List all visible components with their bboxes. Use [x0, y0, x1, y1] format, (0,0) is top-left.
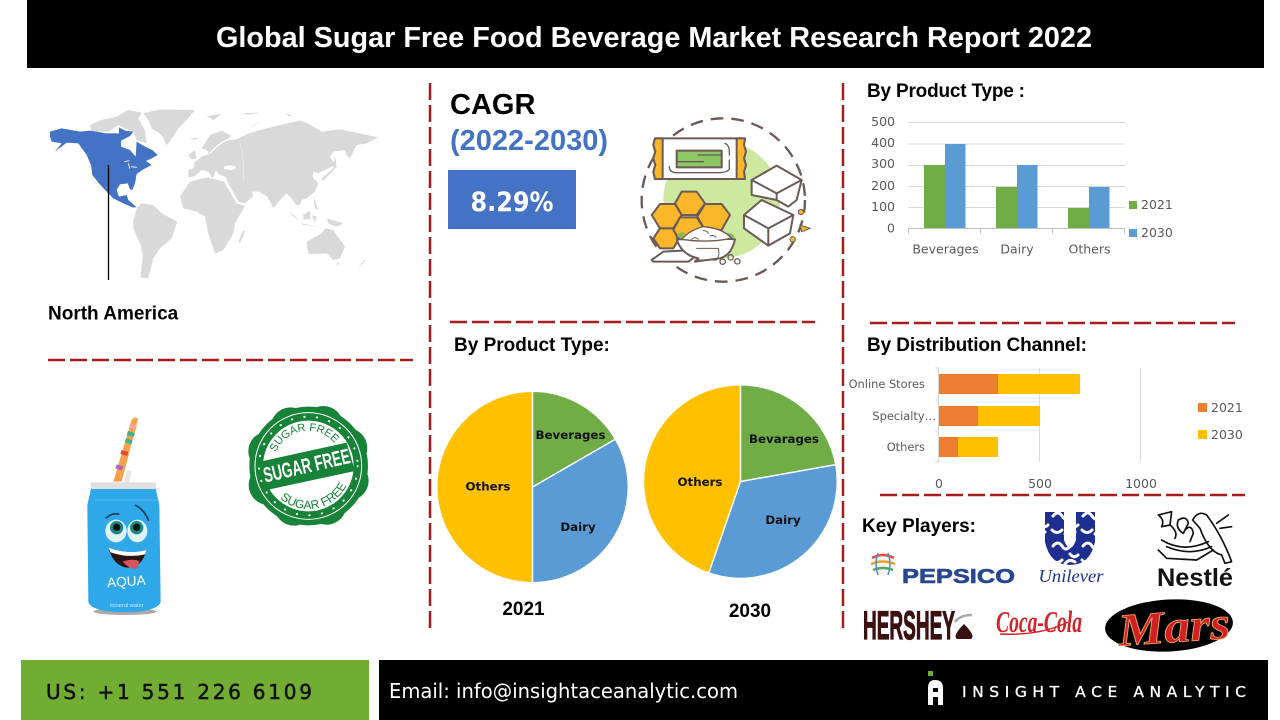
logo: Mars: Mars: [1115, 597, 1232, 656]
icon: sugar free seal: SUGAR FREE: [281, 482, 346, 509]
pie year labels: [502, 599, 771, 622]
legend: distribution channel: [1198, 400, 1243, 442]
email: Email: info@insightaceanalytic.com: [389, 679, 738, 703]
icon: blue aqua can: [87, 418, 161, 615]
region label: North America: [48, 304, 179, 324]
logo: Hershey: [863, 604, 972, 648]
heading: by distribution channel: By Distribution Channel:: [867, 335, 1087, 356]
bar chart: distribution channel: Others: [887, 440, 925, 454]
brand name: INSIGHT ACE ANALYTIC: [962, 683, 1246, 701]
pie chart 2030: [644, 385, 836, 578]
heading: by product type bars: By Product Type :: [867, 81, 1025, 102]
legend: product type: [1129, 197, 1173, 240]
logo: Hershey: HERSHEY: [863, 604, 955, 648]
heading: by product type pies: By Product Type:: [454, 335, 610, 356]
column chart: product type: Beverages: [912, 242, 979, 256]
icon: sugar free seal: SUGAR FREE: [270, 423, 340, 451]
bar chart: distribution channel: Specialty…: [872, 409, 936, 423]
logo: Unilever: Unilever: [1038, 566, 1105, 586]
connector line: [108, 165, 110, 280]
bar chart: distribution channel: 1000: [1125, 476, 1157, 491]
logo: Nestle: [1157, 512, 1233, 592]
icon: sugar free foods: [642, 118, 810, 282]
icon: sugar free seal: SUGAR FREE: [261, 444, 352, 487]
legend: product type: 2030: [1141, 225, 1173, 240]
pie chart 2021: Beverages: [536, 428, 605, 442]
logo: Coca-Cola: [996, 604, 1082, 639]
bar chart: distribution channel: 500: [1028, 476, 1052, 491]
world map: North America highlighted: [50, 109, 378, 280]
pie chart 2030: Dairy: [765, 513, 801, 527]
column chart: product type: 500: [871, 114, 895, 129]
column chart: product type: 200: [871, 178, 895, 193]
legend: distribution channel: 2021: [1211, 400, 1243, 415]
column chart: product type: 0: [887, 220, 895, 236]
pie year labels: 2030: [729, 601, 771, 622]
CAGR heading: [450, 89, 608, 157]
CAGR heading: (2022-2030): [450, 125, 608, 157]
icon: brand mark: [928, 671, 943, 705]
column chart: product type: 400: [871, 135, 895, 150]
title banner: [27, 0, 1264, 68]
logo: Unilever: [1038, 512, 1105, 586]
pie year labels: 2021: [502, 599, 545, 620]
pie chart 2021: Others: [466, 480, 510, 494]
column chart: product type: 300: [871, 156, 895, 171]
CAGR value box: 8.29%: [470, 187, 554, 218]
CAGR heading: CAGR: [450, 89, 535, 121]
CAGR value box: [448, 170, 576, 229]
pie chart 2030: Others: [678, 475, 722, 489]
legend: distribution channel: 2030: [1211, 427, 1243, 442]
pie chart 2021: [438, 392, 628, 582]
title banner: Global Sugar Free Food Beverage Market Research Report 2022: [216, 22, 1092, 54]
footer: contact and brand panel: [379, 660, 1268, 720]
footer: phone panel: [21, 660, 369, 720]
logo: PepsiCo: [871, 552, 1015, 588]
pie chart 2021: Dairy: [560, 520, 596, 534]
column chart: product type: Dairy: [1000, 242, 1034, 256]
icon: blue aqua can: AQUA: [107, 573, 147, 590]
logo: Nestle: Nestlé: [1157, 564, 1233, 592]
logo: Coca-Cola: Coca-Cola: [996, 604, 1082, 639]
pie chart 2030: Bevarages: [749, 432, 819, 446]
footer: phone panel: US: +1 551 226 6109: [46, 680, 312, 704]
column chart: product type: [871, 114, 1173, 256]
heading: key players: Key Players:: [862, 516, 976, 537]
column chart: product type: 100: [871, 199, 895, 214]
bar chart: distribution channel: Online Stores: [849, 377, 925, 391]
column chart: product type: Others: [1068, 242, 1111, 256]
bar chart: distribution channel: 0: [935, 476, 943, 491]
legend: product type: 2021: [1141, 197, 1173, 212]
icon: sugar free seal: [248, 406, 369, 526]
icon: blue aqua can: mineral water: [110, 603, 144, 609]
logo: PepsiCo: PEPSICO: [902, 566, 1015, 588]
bar chart: distribution channel: [849, 368, 1243, 491]
